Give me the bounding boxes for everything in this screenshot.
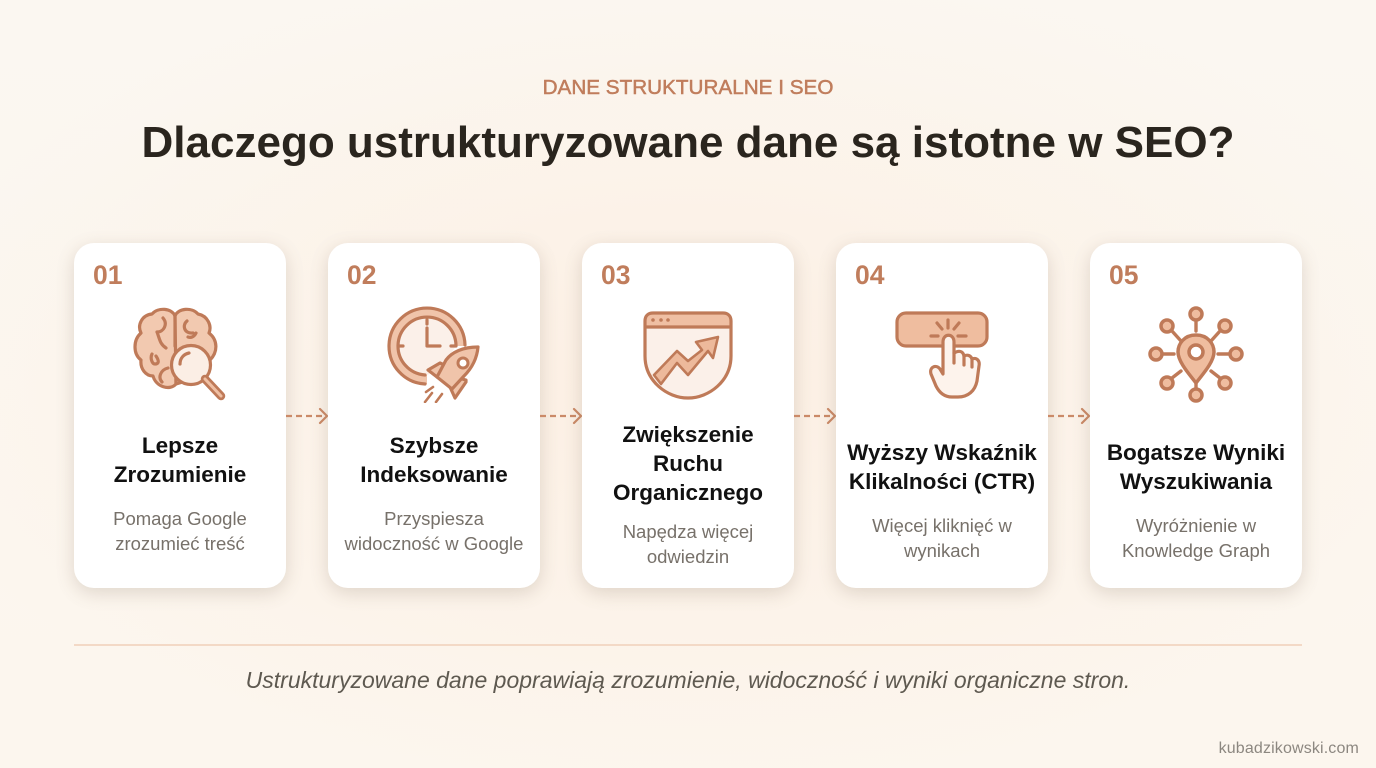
card title: Klikalności (CTR): [849, 469, 1035, 494]
card description: [1122, 515, 1270, 561]
number 01: 01: [93, 260, 122, 290]
card description: Pomaga Google: [113, 508, 247, 529]
card title: Wyższy Wskaźnik: [847, 440, 1037, 465]
card title: Zrozumienie: [114, 462, 246, 487]
summary text: Ustrukturyzowane dane poprawiają zrozumienie, widoczność i wyniki organiczne stron.: [246, 667, 1130, 693]
card 5: [1090, 243, 1302, 588]
number 04: 04: [855, 260, 884, 290]
card description: Przyspiesza: [384, 508, 484, 529]
card description: [872, 515, 1012, 561]
card title: Lepsze: [142, 433, 218, 458]
card description: zrozumieć treść: [115, 533, 245, 554]
card title: [1107, 440, 1285, 494]
number 05: 05: [1109, 260, 1138, 290]
card title: Ruchu: [653, 451, 723, 476]
card description: [623, 521, 753, 567]
arrow 4: [1048, 408, 1090, 424]
number 02: 02: [347, 260, 376, 290]
arrow 3: [794, 408, 836, 424]
card description: Knowledge Graph: [1122, 540, 1270, 561]
card description: [113, 508, 247, 554]
arrow 2: [540, 408, 582, 424]
card description: [344, 508, 523, 554]
icon: clock with rocket: [387, 306, 480, 403]
card title: [847, 440, 1037, 494]
divider: [74, 644, 1302, 646]
card description: wynikach: [904, 540, 980, 561]
icon: brain with magnifier: [133, 308, 226, 400]
card title: Organicznego: [613, 480, 763, 505]
card title: Bogatsze Wyniki: [1107, 440, 1285, 465]
card title: Wyszukiwania: [1120, 469, 1272, 494]
title: Dlaczego ustrukturyzowane dane są istotne w SEO?: [142, 118, 1234, 167]
card 1: [74, 243, 286, 588]
card 3: [582, 243, 794, 588]
icon: clicking hand on button: [895, 311, 989, 399]
card title: [613, 422, 763, 505]
icon: location pin network: [1148, 306, 1244, 403]
icon: browser shield with growth arrow: [643, 311, 733, 400]
arrow 1: [286, 408, 328, 424]
card description: Więcej kliknięć w: [872, 515, 1012, 536]
card title: [114, 433, 246, 487]
card 2: [328, 243, 540, 588]
card description: widoczność w Google: [345, 533, 523, 554]
card description: Wyróżnienie w: [1136, 515, 1256, 536]
card description: Napędza więcej: [623, 521, 753, 542]
watermark: kubadzikowski.com: [1219, 740, 1359, 757]
card title: Zwiększenie: [622, 422, 754, 447]
card title: [360, 433, 508, 487]
card description: odwiedzin: [647, 546, 729, 567]
card 4: [836, 243, 1048, 588]
eyebrow heading: DANE STRUKTURALNE I SEO: [543, 76, 833, 99]
number 03: 03: [601, 260, 630, 290]
card title: Szybsze: [390, 433, 478, 458]
card title: Indeksowanie: [360, 462, 508, 487]
